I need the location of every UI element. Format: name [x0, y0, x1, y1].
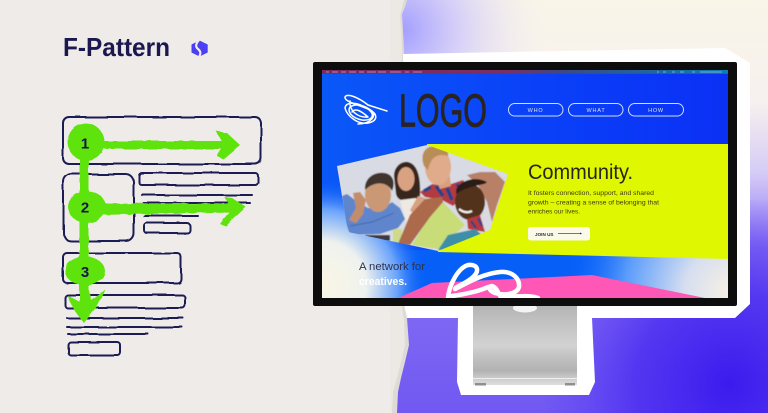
body copy: It fosters connection, support, and shared [528, 190, 655, 197]
lime hero panel [427, 144, 728, 259]
tagline: creatives. [359, 276, 407, 288]
tagline [359, 262, 425, 285]
nav: how: HOW [648, 108, 664, 114]
white scribble [448, 265, 538, 298]
scribble logo [345, 95, 387, 124]
man in blue sweater [342, 173, 405, 243]
nav: who: WHO [528, 108, 543, 114]
blond man [420, 146, 470, 206]
icon: brand logo [192, 39, 208, 58]
nav: who [508, 104, 563, 116]
arrow 1 [100, 131, 240, 159]
woman with raised arm [438, 172, 505, 251]
step number 3: 3 [81, 264, 89, 281]
vertical scan path [80, 145, 88, 310]
paper main area [0, 0, 390, 413]
F-pattern green arrows [65, 124, 246, 323]
nav: what [568, 104, 623, 116]
community photo [337, 145, 508, 251]
woman in yellow top [398, 197, 465, 249]
monitor bezel [313, 62, 737, 306]
circle 3 [65, 256, 105, 286]
button: join us: JOIN US [535, 232, 554, 238]
screen background [322, 70, 728, 298]
purple gradient background [396, 0, 768, 413]
menu bar [322, 70, 728, 74]
tagline: A network for [359, 261, 425, 273]
arrow 2 [100, 197, 246, 226]
monitor stand [473, 304, 577, 386]
arrow 3 head [68, 289, 105, 323]
step number 2: 2 [81, 200, 89, 216]
website screen [322, 70, 728, 298]
logo word: LOGO [399, 84, 487, 136]
body copy: growth – creating a sense of belonging that [528, 200, 659, 206]
button: join us [528, 227, 590, 240]
body copy: enriches our lives. [528, 208, 580, 216]
nav: what: WHAT [587, 108, 605, 114]
circle 2 [68, 191, 106, 223]
heading: community: Community. [528, 160, 633, 184]
body copy [528, 190, 659, 216]
step number 1: 1 [81, 136, 89, 152]
torn paper edge [0, 0, 409, 413]
circle 1 [68, 124, 104, 160]
woman with dark hair [394, 162, 425, 222]
white sticker outline around monitor [403, 48, 750, 395]
nav: how [628, 104, 684, 116]
title: F-Pattern [63, 32, 170, 62]
paper sheet [0, 0, 405, 413]
pink shape [398, 275, 705, 298]
wireframe: page layout sketch [63, 117, 261, 355]
